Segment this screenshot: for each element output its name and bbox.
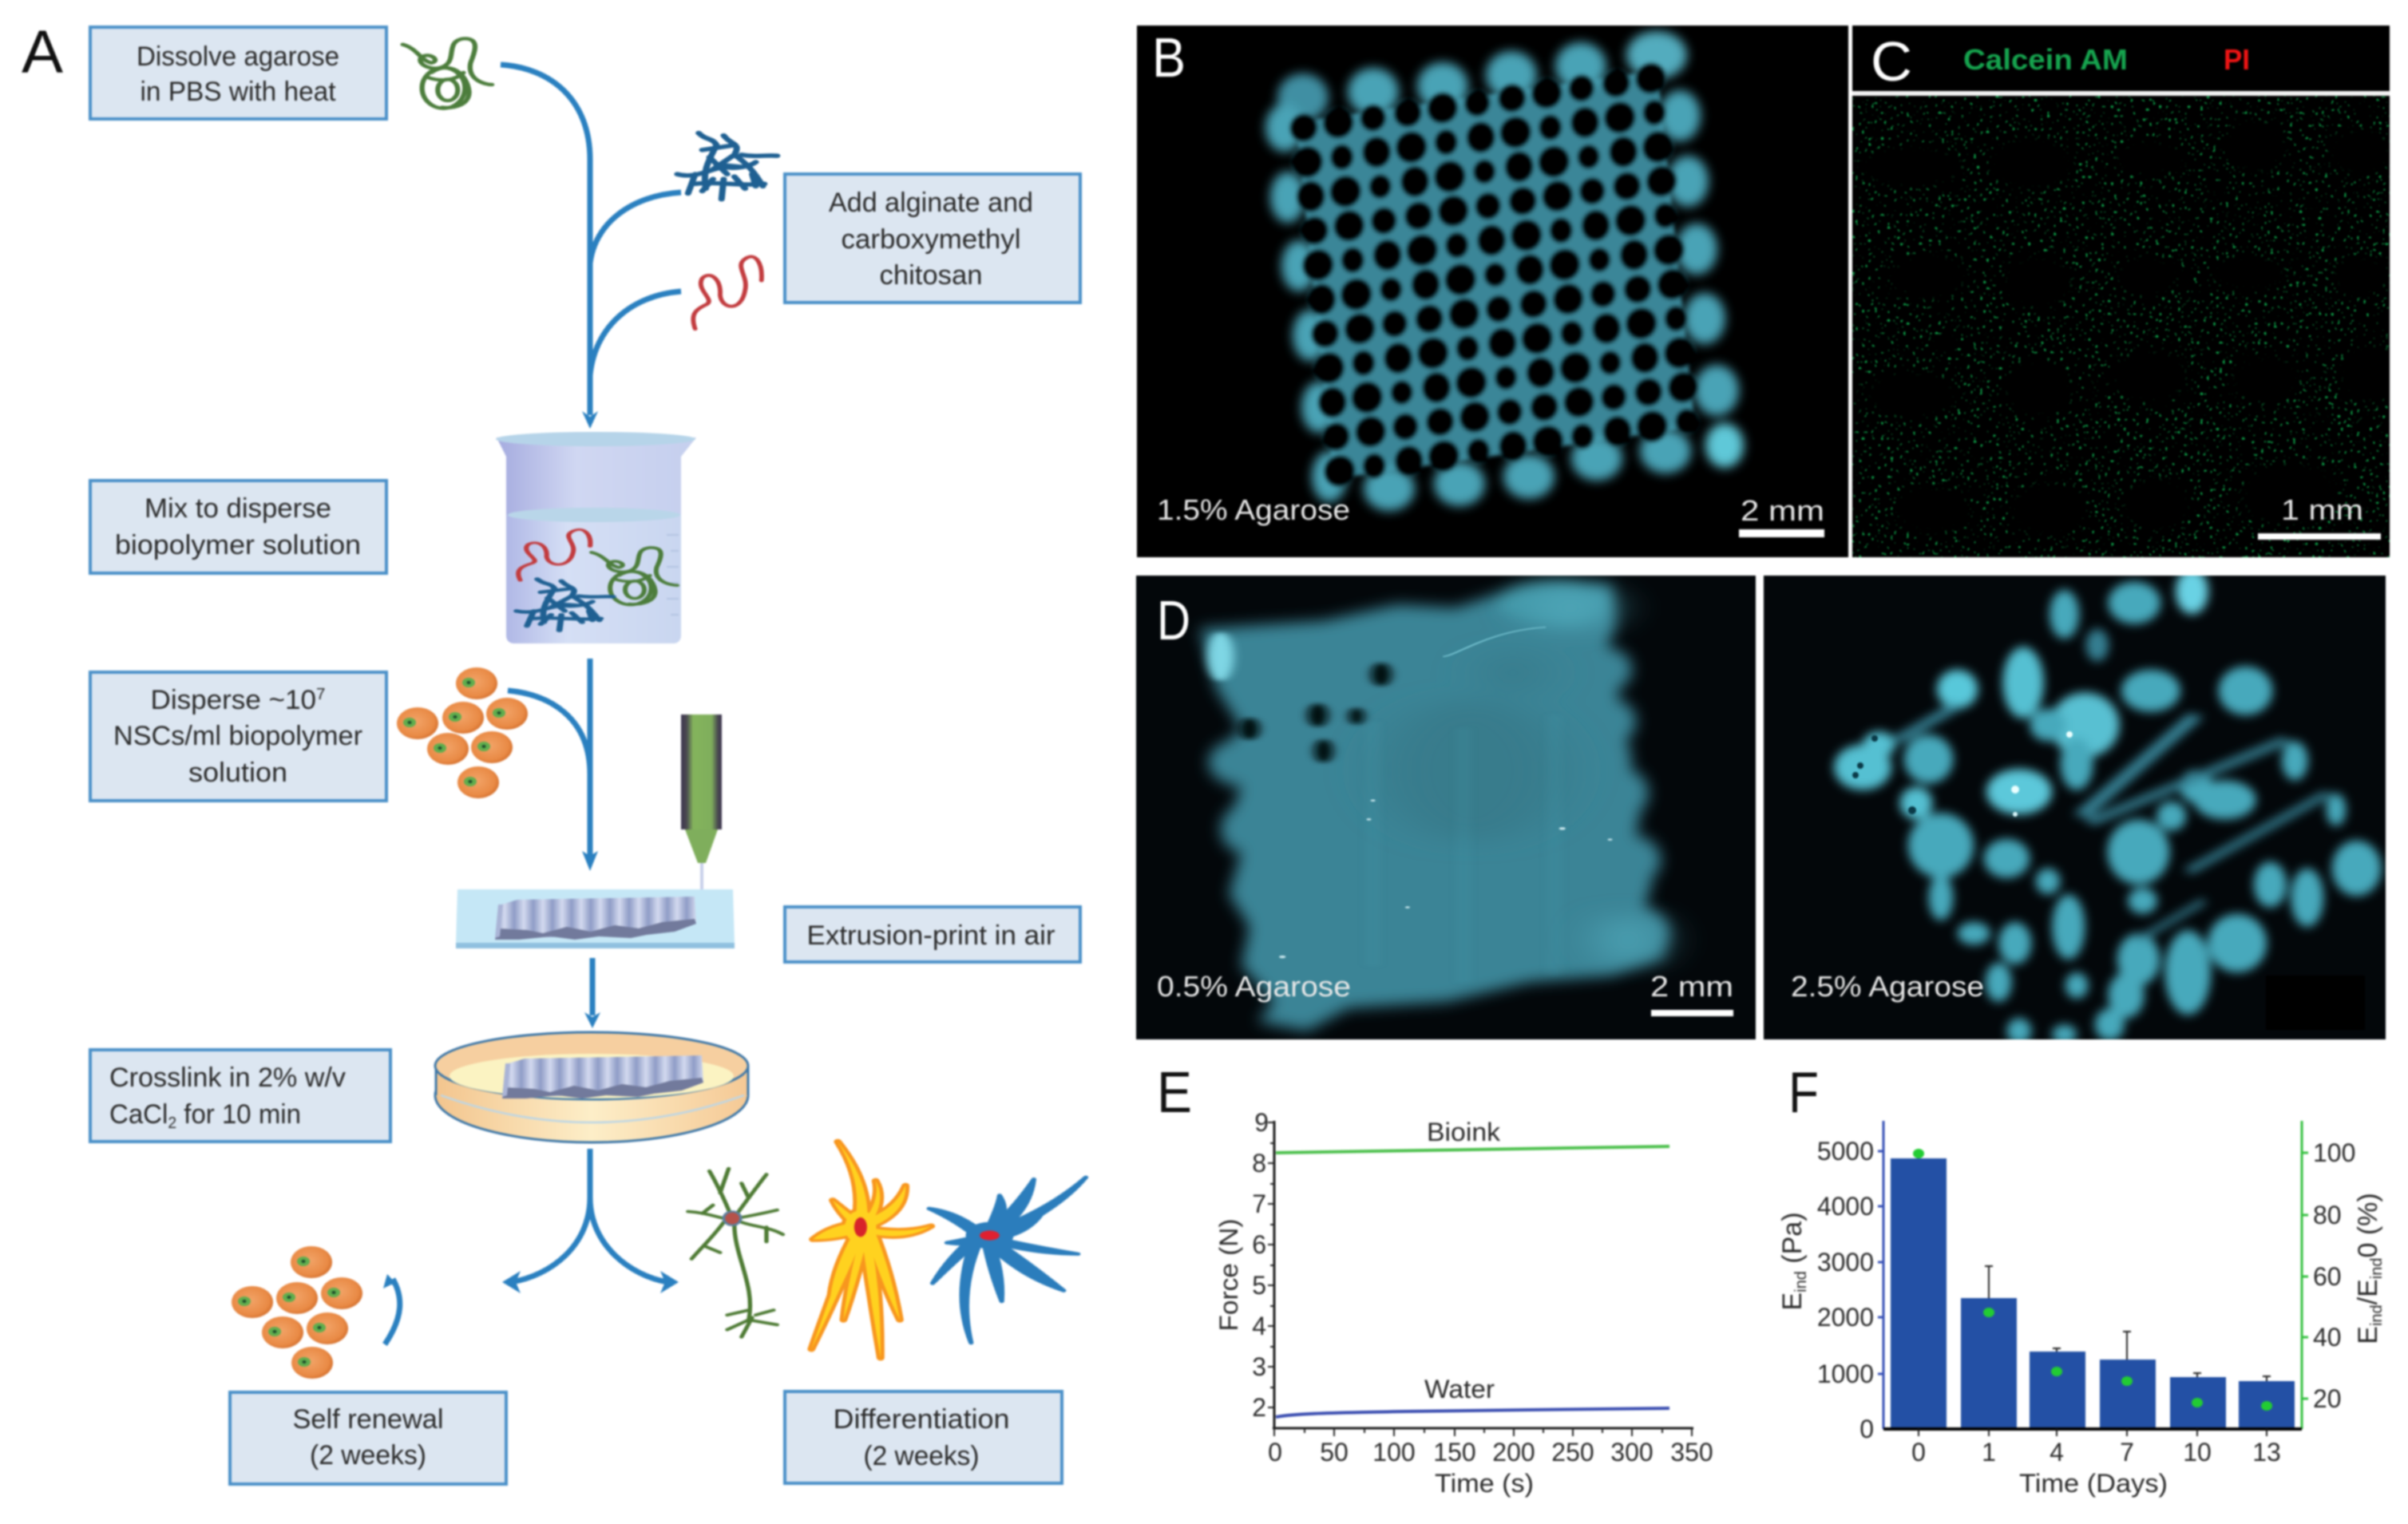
- step box: crosslink: CaCl: [109, 1099, 170, 1130]
- scale bar: 1 mm: 1 mm: [2281, 493, 2363, 526]
- printed mesh lattice: [1257, 26, 1752, 519]
- label: Bioink: Bioink: [1427, 1118, 1501, 1146]
- normalised modulus markers: [1913, 1149, 2272, 1411]
- chart E: force vs time: [1214, 1108, 1713, 1498]
- step box: mix: Mix to disperse: [145, 493, 331, 524]
- panel D right: 2.5% agarose micrograph: [1764, 568, 2386, 1044]
- panel D left: 0.5% agarose micrograph: [1136, 576, 1756, 1039]
- x tick labels: [1268, 1438, 1713, 1467]
- x tick labels: 4: [2050, 1438, 2064, 1467]
- panel label: C: C: [1871, 30, 1912, 93]
- panel A: process flow arrows: [383, 65, 681, 1344]
- x tick labels: 200: [1492, 1438, 1535, 1467]
- step box: differentiation: Differentiation: [834, 1404, 1009, 1435]
- x tick labels: 300: [1610, 1438, 1654, 1467]
- panel label: D: D: [1157, 589, 1190, 651]
- step box: add alginate and chitosan: carboxymethyl: [842, 224, 1020, 255]
- streaks and highlights: [1207, 585, 1653, 982]
- line: bioink: [1276, 1146, 1669, 1153]
- x tick labels: 1: [1982, 1438, 1996, 1467]
- x tick labels: 150: [1433, 1438, 1476, 1467]
- step box: extrusion print: [785, 907, 1080, 962]
- step box: add alginate and chitosan: chitosan: [880, 260, 982, 291]
- icon: neural stem cells cluster: [397, 667, 528, 798]
- step box: crosslink: 2: [168, 1114, 176, 1132]
- y tick labels: 4: [1252, 1312, 1266, 1340]
- right y tick labels: 100: [2313, 1138, 2355, 1167]
- scale bar: 2 mm: [1739, 494, 1824, 537]
- right y tick labels: 20: [2313, 1384, 2342, 1413]
- legend: Calcein AM: Calcein AM: [1963, 43, 2128, 76]
- x tick labels: 0: [1268, 1438, 1282, 1467]
- axis title: right: /E: [2353, 1279, 2383, 1304]
- axis title: right: 0 (%): [2353, 1193, 2383, 1258]
- step box: disperse cells: [90, 672, 386, 801]
- x tick labels: 350: [1670, 1438, 1713, 1467]
- right y tick labels: 40: [2313, 1323, 2342, 1352]
- left y tick labels: 2000: [1817, 1303, 1874, 1332]
- step box: extrusion print: Extrusion-print in air: [806, 920, 1055, 951]
- embedded bubbles and bright spots: [1852, 731, 2073, 817]
- modulus bars: [1891, 1158, 2295, 1428]
- left y tick labels: 5000: [1817, 1137, 1874, 1166]
- left y tick labels: [1817, 1137, 1874, 1443]
- axis title: left: ind: [1792, 1271, 1810, 1292]
- icon: print nozzle: [681, 714, 722, 899]
- y tick labels: 3: [1252, 1352, 1266, 1381]
- axis title: bottom: Time (Days): [2019, 1469, 2168, 1498]
- axis title: left: (Pa): [1777, 1212, 1808, 1271]
- icon: orange astrocyte: [811, 1142, 931, 1358]
- icon: beaker with polymers: [496, 432, 696, 643]
- panel B: 1.5% agarose micrograph: [1137, 26, 1848, 557]
- scale bar: 2 mm: 2 mm: [1741, 494, 1824, 527]
- green cell speckle field: [1852, 96, 2402, 557]
- chart F: modulus over time: [1777, 1121, 2386, 1498]
- y tick labels: [1252, 1108, 1269, 1422]
- header band divider: [1852, 91, 2390, 96]
- x tick labels: 0: [1911, 1438, 1926, 1467]
- caption: 1.5% agarose: 1.5% Agarose: [1157, 493, 1350, 526]
- x tick labels: [1911, 1438, 2281, 1467]
- fragmented print blobs: [1834, 568, 2382, 1044]
- scale bar: 2 mm: 2 mm: [1650, 970, 1733, 1003]
- step box: crosslink: [90, 1050, 390, 1142]
- x tick labels: 10: [2183, 1438, 2212, 1467]
- scale bar: 1 mm: [2258, 493, 2381, 540]
- masked black square: [2266, 976, 2365, 1030]
- icon: agarose polymer: [403, 38, 492, 109]
- line: water: [1276, 1408, 1669, 1417]
- y tick labels: 5: [1252, 1271, 1266, 1300]
- step box: self renewal: (2 weeks): [310, 1440, 426, 1471]
- step box: dissolve agarose: in PBS with heat: [141, 77, 336, 107]
- x tick labels: 100: [1372, 1438, 1416, 1467]
- error bars: [1985, 1266, 2271, 1381]
- x tick labels: 250: [1551, 1438, 1594, 1467]
- icon: differentiated neuron: [688, 1169, 783, 1337]
- axis title: right: ind: [2368, 1258, 2386, 1279]
- left y tick labels: 4000: [1817, 1192, 1874, 1221]
- right y tick labels: 80: [2313, 1201, 2342, 1229]
- axis title: right: ind: [2368, 1304, 2386, 1326]
- step box: crosslink: Crosslink in 2% w/v: [109, 1063, 346, 1093]
- step box: disperse cells: 7: [316, 686, 326, 703]
- icon: petri dish with scaffold: [435, 1032, 748, 1142]
- step box: differentiation: (2 weeks): [864, 1441, 979, 1471]
- step box: disperse cells: NSCs/ml biopolymer: [113, 721, 362, 751]
- icon: blue glial cell: [929, 1178, 1086, 1343]
- icon: carboxymethyl chitosan polymer: [693, 257, 762, 329]
- step box: differentiation: [785, 1391, 1062, 1483]
- x tick labels: 50: [1320, 1438, 1349, 1467]
- panel label: F: F: [1788, 1061, 1819, 1125]
- step box: add alginate and chitosan: [785, 174, 1080, 303]
- scale bar: 2 mm: [1650, 970, 1733, 1016]
- panel label: E: E: [1157, 1061, 1192, 1125]
- y tick labels: 8: [1252, 1149, 1266, 1178]
- left y tick labels: 3000: [1817, 1248, 1874, 1277]
- step box: self renewal: [230, 1392, 506, 1484]
- x tick labels: 7: [2120, 1438, 2134, 1467]
- legend: PI: PI: [2224, 43, 2250, 76]
- x tick labels: 13: [2252, 1438, 2281, 1467]
- axis title: left: E: [1777, 1292, 1808, 1311]
- icon: glass slide with printed scaffold: [456, 889, 735, 948]
- step box: dissolve agarose: [90, 27, 386, 119]
- y tick labels: 6: [1252, 1230, 1266, 1259]
- y tick labels: 9: [1254, 1108, 1269, 1137]
- label: Water: Water: [1424, 1375, 1495, 1403]
- caption: 0.5% agarose: 0.5% Agarose: [1157, 970, 1351, 1003]
- axis title: Time: Time (s): [1435, 1469, 1534, 1498]
- left y tick labels: 0: [1859, 1415, 1874, 1443]
- step box: self renewal: Self renewal: [292, 1404, 444, 1435]
- panel label: A: A: [22, 18, 63, 86]
- step box: disperse cells: solution: [188, 758, 287, 788]
- icon: alginate polymer: [677, 133, 777, 200]
- left y tick labels: 1000: [1817, 1360, 1874, 1388]
- axis title: Force: Force (N): [1214, 1218, 1243, 1332]
- step box: crosslink: for 10 min: [176, 1099, 301, 1130]
- merged print blob: [1200, 582, 1669, 1031]
- caption: 2.5% agarose: 2.5% Agarose: [1791, 970, 1984, 1003]
- step box: mix: biopolymer solution: [115, 530, 361, 560]
- step box: mix: [90, 481, 386, 573]
- step box: add alginate and chitosan: Add alginate and: [829, 188, 1033, 218]
- axis title: right: E: [2353, 1326, 2383, 1344]
- icon: self-renewing cell cluster: [232, 1246, 362, 1379]
- step box: disperse cells: Disperse ~10: [150, 685, 311, 715]
- right y tick labels: 60: [2313, 1262, 2342, 1291]
- right y tick labels: [2313, 1138, 2355, 1413]
- y tick labels: 2: [1252, 1393, 1266, 1422]
- axes: [1878, 1121, 2308, 1436]
- panel C: live/dead staining: [1852, 26, 2402, 557]
- panel label: B: B: [1152, 26, 1186, 89]
- step box: dissolve agarose: Dissolve agarose: [137, 42, 339, 72]
- y tick labels: 7: [1252, 1190, 1266, 1218]
